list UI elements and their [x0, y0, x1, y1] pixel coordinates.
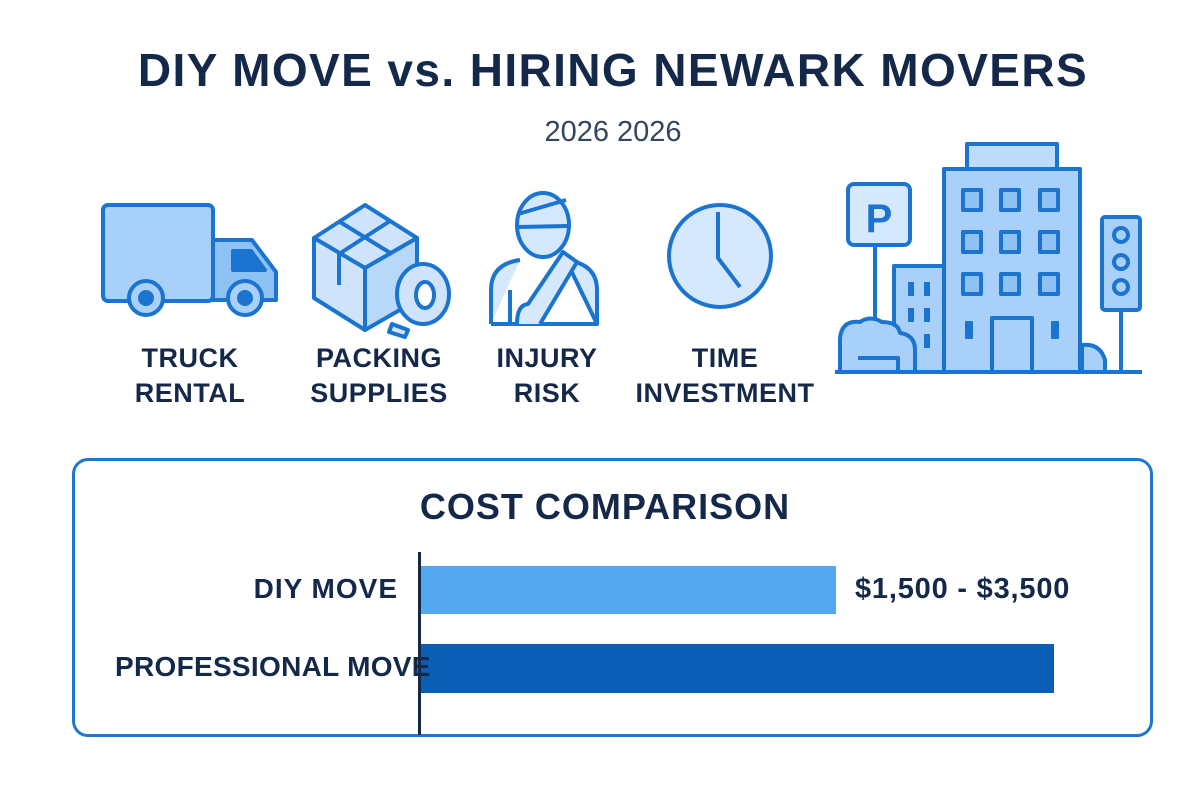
value: DIY: $1,500 - $3,500 — [855, 573, 1070, 605]
icons — [101, 142, 1142, 374]
bar: DIY — [421, 566, 836, 614]
icon: box and tape — [314, 205, 449, 337]
heading: COST COMPARISON — [420, 486, 790, 527]
subtitle: 2026 2026 — [544, 116, 682, 148]
label: packing supplies: SUPPLIES — [310, 378, 448, 408]
label: packing supplies — [310, 343, 448, 408]
panel: cost comparison — [72, 458, 1153, 737]
icon: truck — [103, 205, 276, 315]
label: time investment — [635, 343, 814, 408]
icon: city buildings: P — [866, 197, 892, 241]
label: packing supplies: PACKING — [316, 343, 442, 373]
label: professional move: PROFESSIONAL MOVE — [115, 651, 431, 682]
label: time investment: TIME — [692, 343, 758, 373]
label: truck rental: RENTAL — [135, 378, 245, 408]
label: injury risk — [496, 343, 598, 408]
axis — [418, 552, 421, 735]
icon: injured person — [491, 193, 597, 324]
label: truck rental — [135, 343, 245, 408]
title: DIY MOVE vs. HIRING NEWARK MOVERS — [138, 44, 1088, 96]
icon: clock — [669, 205, 771, 307]
label: DIY move: DIY MOVE — [254, 573, 398, 604]
label: truck rental: TRUCK — [142, 343, 238, 373]
label: time investment: INVESTMENT — [635, 378, 814, 408]
bar: professional — [421, 644, 1054, 693]
icon: city buildings — [835, 144, 1142, 372]
label: injury risk: INJURY — [496, 343, 598, 373]
label: injury risk: RISK — [514, 378, 580, 408]
bar chart — [115, 552, 1070, 735]
